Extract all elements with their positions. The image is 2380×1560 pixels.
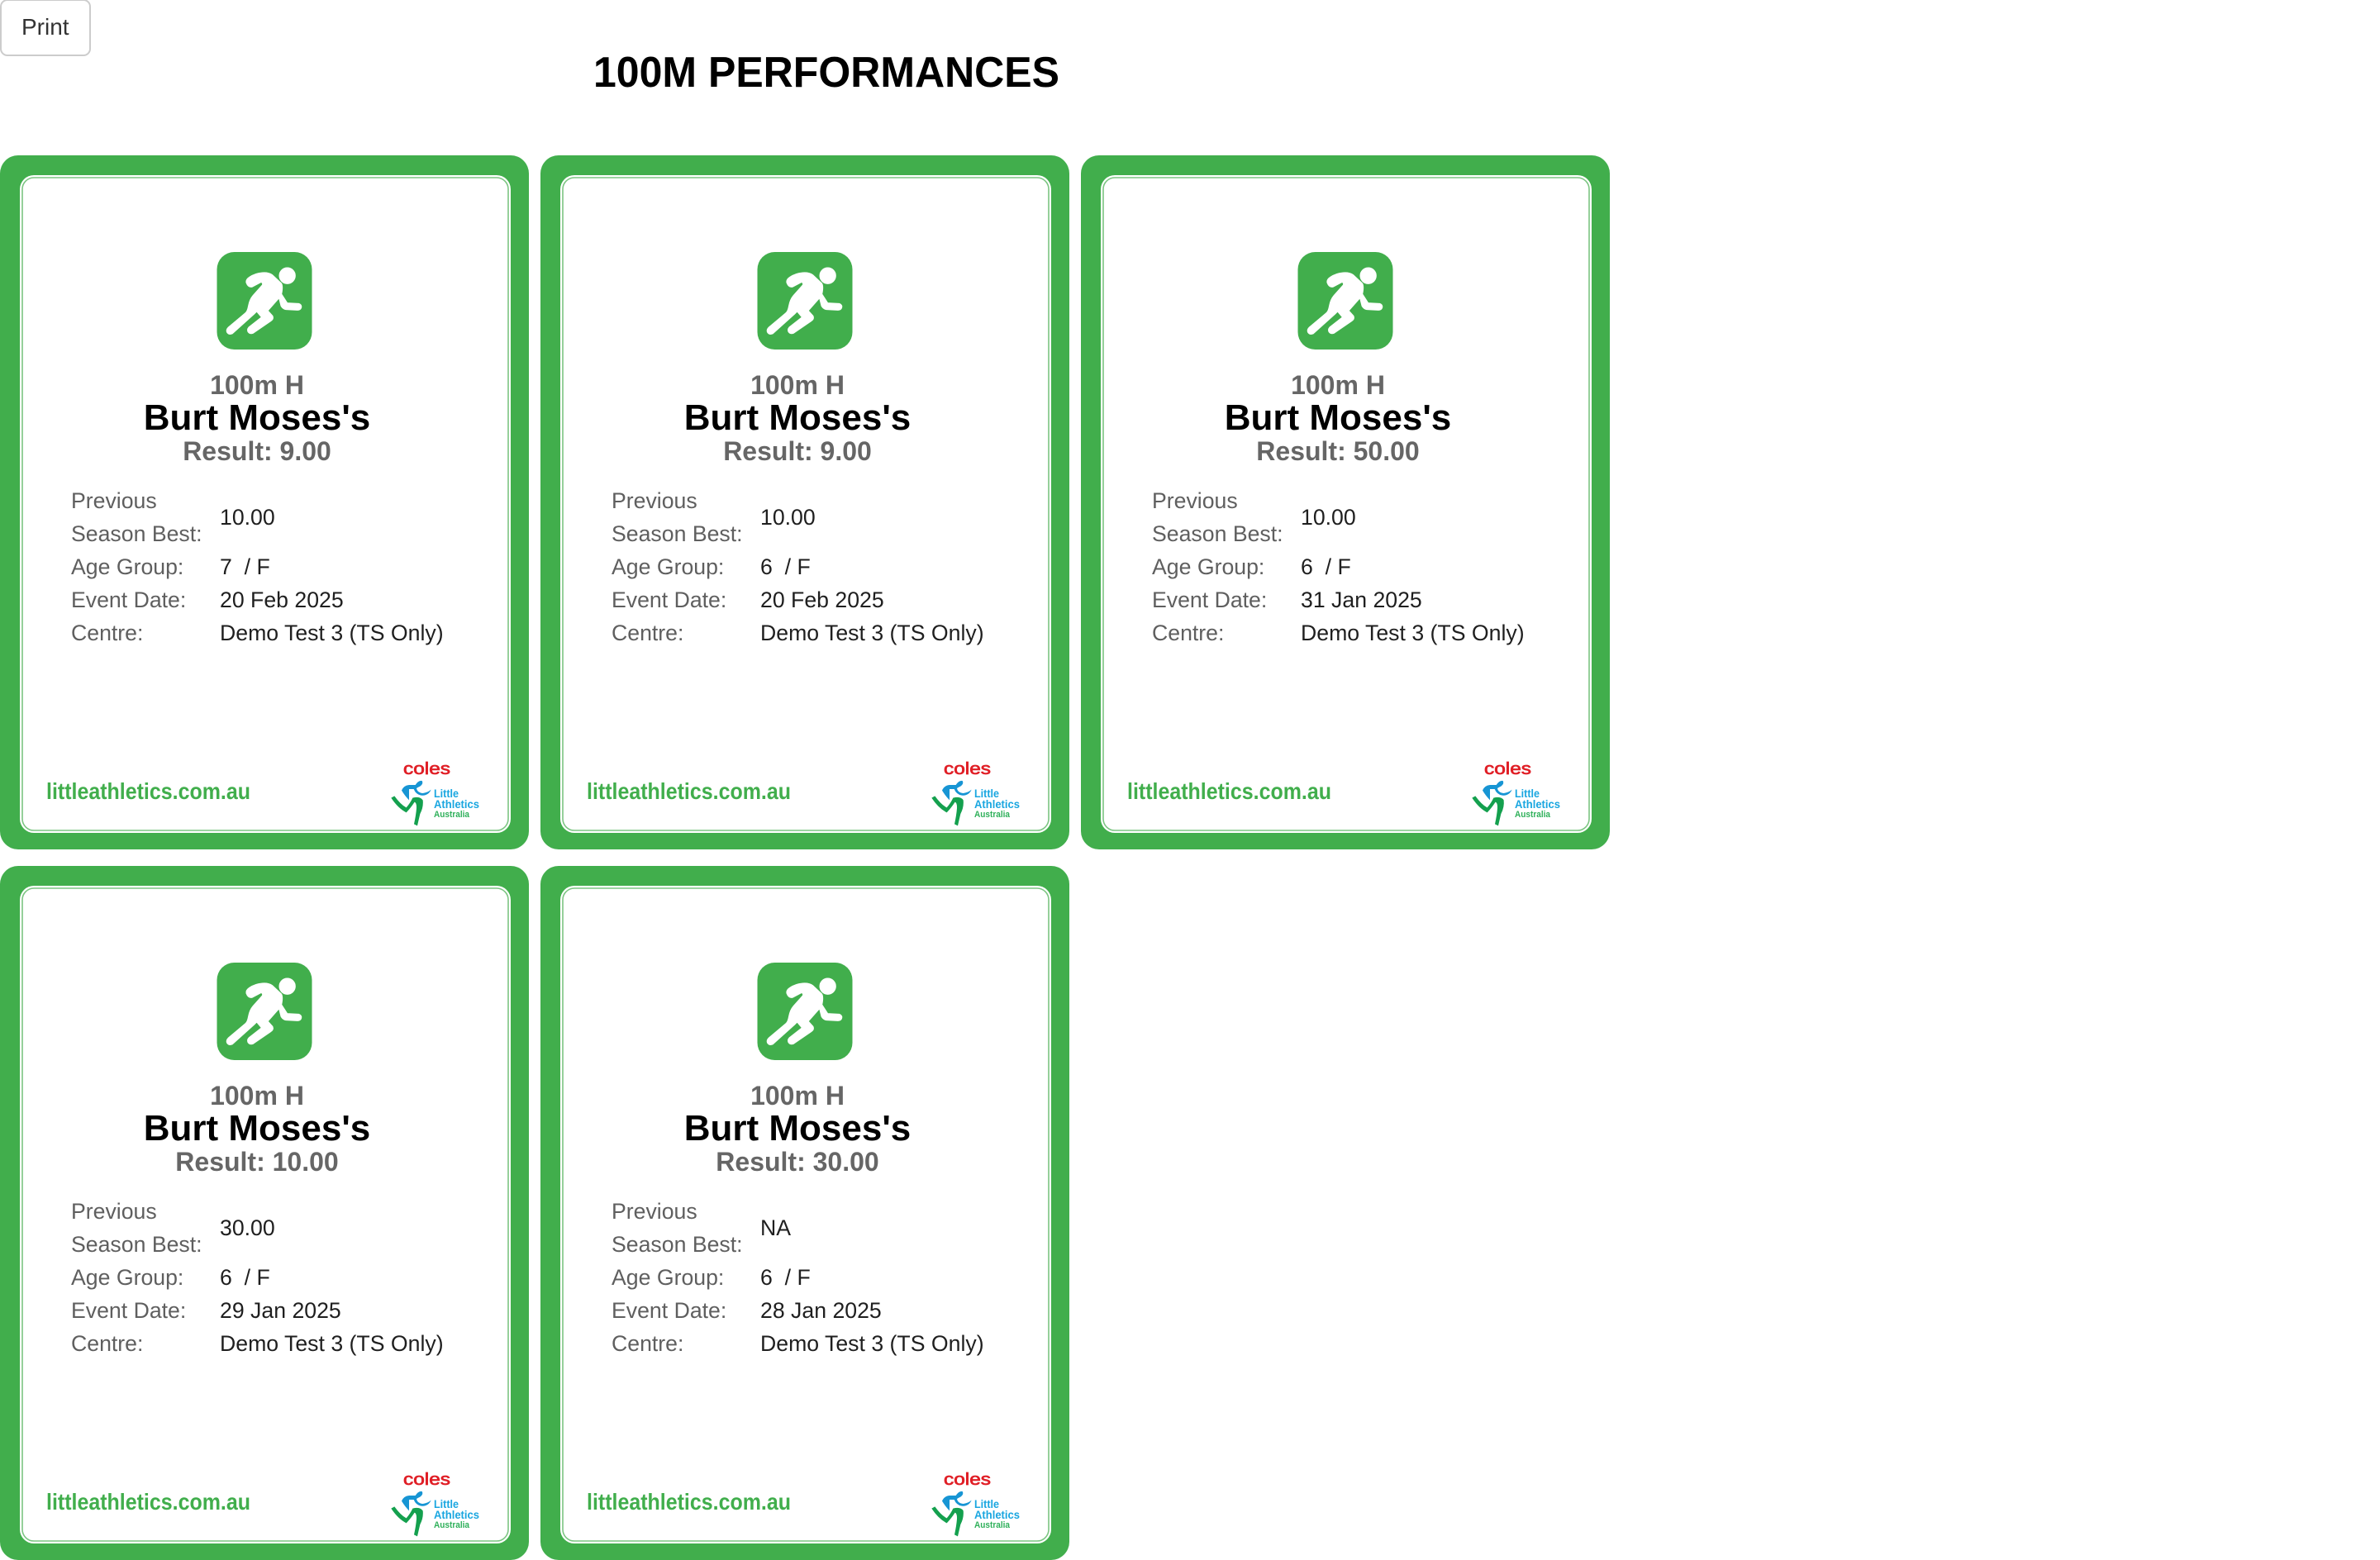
details table: Event Date: — [71, 587, 186, 612]
details table: Centre: — [71, 621, 143, 645]
details table — [1152, 488, 1525, 645]
panel: card 5 — [540, 866, 1069, 1560]
details table: Centre: — [71, 1331, 143, 1356]
details table: Previous — [1152, 488, 1238, 513]
details table: 20 Feb 2025 — [220, 587, 344, 612]
website: littleathletics.com.au — [46, 778, 250, 804]
details table: Previous — [71, 488, 157, 513]
logo: coles and Little Athletics — [1472, 760, 1560, 825]
details table: 31 Jan 2025 — [1301, 587, 1422, 612]
panel: card 3 — [1081, 155, 1610, 849]
details table: 28 Jan 2025 — [760, 1298, 882, 1323]
logo: coles and Little Athletics: Athletics — [1515, 797, 1560, 811]
details table: Event Date: — [71, 1298, 186, 1323]
result: Result: 50.00 — [1256, 436, 1420, 466]
logo: coles and Little Athletics: Little — [974, 787, 999, 800]
details table: Age Group: — [612, 1265, 724, 1290]
details table: 10.00 — [760, 505, 816, 530]
details table — [612, 488, 984, 645]
panel: card 2 — [540, 155, 1069, 849]
result: Result: 30.00 — [716, 1147, 879, 1177]
logo: coles and Little Athletics: Athletics — [434, 1508, 479, 1521]
logo: coles and Little Athletics: Athletics — [974, 797, 1020, 811]
details table: Previous — [71, 1199, 157, 1224]
logo: coles and Little Athletics: Little — [434, 787, 459, 800]
details table: Demo Test 3 (TS Only) — [220, 1331, 444, 1356]
logo: coles and Little Athletics: Australia — [434, 810, 470, 820]
details table: Event Date: — [612, 1298, 726, 1323]
details table: Age Group: — [1152, 554, 1264, 579]
logo: coles and Little Athletics: Little — [974, 1497, 999, 1510]
icon: runner — [757, 963, 853, 1060]
result: Result: 9.00 — [183, 436, 331, 466]
details table — [612, 1199, 984, 1356]
logo: coles and Little Athletics — [391, 760, 479, 825]
event name: 100m H — [1291, 370, 1385, 400]
logo: coles and Little Athletics — [931, 760, 1020, 825]
details table: 20 Feb 2025 — [760, 587, 884, 612]
athlete name: Burt Moses's — [684, 397, 911, 438]
icon: runner — [1297, 252, 1393, 350]
logo: coles and Little Athletics: coles — [944, 760, 991, 778]
details table: 6 / F — [760, 554, 811, 579]
details table: 6 / F — [1301, 554, 1351, 579]
print button: Print — [21, 14, 69, 40]
details table: Event Date: — [1152, 587, 1267, 612]
details table: Demo Test 3 (TS Only) — [1301, 621, 1525, 645]
logo: coles and Little Athletics — [931, 1471, 1020, 1536]
details table: NA — [760, 1215, 791, 1240]
icon: runner — [217, 963, 312, 1060]
details table: Season Best: — [1152, 521, 1283, 546]
athlete name: Burt Moses's — [144, 397, 370, 438]
details table: 7 / F — [220, 554, 270, 579]
logo: coles and Little Athletics: coles — [403, 760, 450, 778]
details table: Demo Test 3 (TS Only) — [760, 1331, 984, 1356]
details table: Age Group: — [612, 554, 724, 579]
details table: Centre: — [1152, 621, 1224, 645]
logo: coles and Little Athletics: Australia — [974, 810, 1011, 820]
details table: Previous — [612, 488, 697, 513]
panel: card 4 — [0, 866, 529, 1560]
panel: card 1 — [0, 155, 529, 849]
event name: 100m H — [750, 1081, 845, 1111]
details table: Age Group: — [71, 1265, 183, 1290]
athlete name: Burt Moses's — [144, 1108, 370, 1149]
details table: 10.00 — [1301, 505, 1356, 530]
logo: coles and Little Athletics: Australia — [974, 1520, 1011, 1530]
details table: Demo Test 3 (TS Only) — [220, 621, 444, 645]
print button — [1, 0, 90, 55]
details table: 10.00 — [220, 505, 275, 530]
details table: Centre: — [612, 621, 683, 645]
details table: Age Group: — [71, 554, 183, 579]
details table: Event Date: — [612, 587, 726, 612]
details table — [71, 488, 444, 645]
logo: coles and Little Athletics: Australia — [434, 1520, 470, 1530]
logo: coles and Little Athletics: Athletics — [434, 797, 479, 811]
icon: runner — [217, 252, 312, 350]
details table: 6 / F — [760, 1265, 811, 1290]
icon: runner — [757, 252, 853, 350]
logo: coles and Little Athletics: Little — [434, 1497, 459, 1510]
details table: 6 / F — [220, 1265, 270, 1290]
logo: coles and Little Athletics: Australia — [1515, 810, 1551, 820]
event name: 100m H — [750, 370, 845, 400]
details table: Season Best: — [612, 521, 743, 546]
logo: coles and Little Athletics: coles — [944, 1471, 991, 1489]
logo: coles and Little Athletics: Little — [1515, 787, 1540, 800]
athlete name: Burt Moses's — [684, 1108, 911, 1149]
details table: 29 Jan 2025 — [220, 1298, 341, 1323]
title: 100M PERFORMANCES — [593, 49, 1059, 97]
logo: coles and Little Athletics: Athletics — [974, 1508, 1020, 1521]
details table: Season Best: — [612, 1232, 743, 1257]
logo: coles and Little Athletics: coles — [1484, 760, 1531, 778]
result: Result: 10.00 — [175, 1147, 339, 1177]
website: littleathletics.com.au — [587, 778, 791, 804]
details table: Previous — [612, 1199, 697, 1224]
website: littleathletics.com.au — [587, 1489, 791, 1515]
details table: Season Best: — [71, 521, 202, 546]
event name: 100m H — [210, 370, 304, 400]
event name: 100m H — [210, 1081, 304, 1111]
logo: coles and Little Athletics: coles — [403, 1471, 450, 1489]
logo: coles and Little Athletics — [391, 1471, 479, 1536]
details table: Demo Test 3 (TS Only) — [760, 621, 984, 645]
result: Result: 9.00 — [723, 436, 872, 466]
website: littleathletics.com.au — [1127, 778, 1331, 804]
website: littleathletics.com.au — [46, 1489, 250, 1515]
details table — [71, 1199, 444, 1356]
details table: Centre: — [612, 1331, 683, 1356]
athlete name: Burt Moses's — [1225, 397, 1451, 438]
details table: 30.00 — [220, 1215, 275, 1240]
details table: Season Best: — [71, 1232, 202, 1257]
